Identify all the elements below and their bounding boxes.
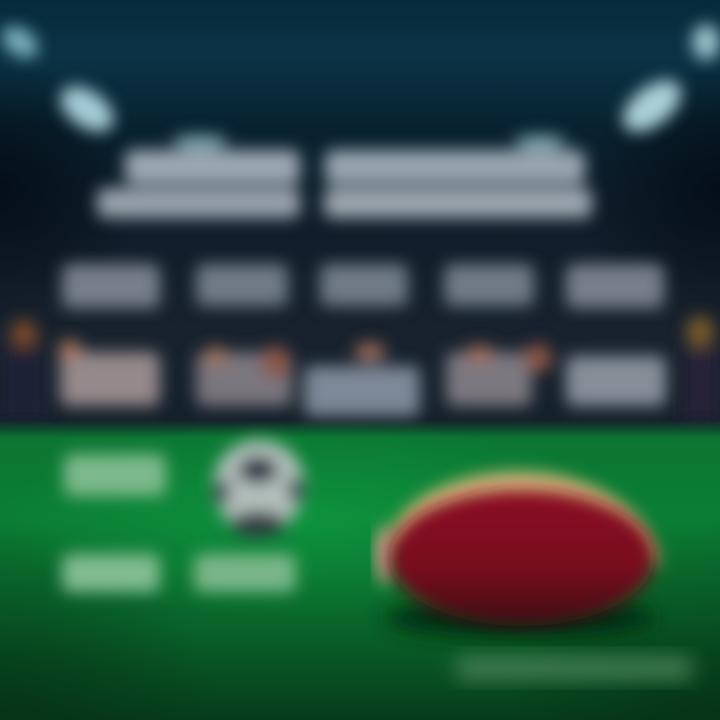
icon: american football xyxy=(376,472,660,638)
stadium background xyxy=(0,0,720,450)
caption bottom right xyxy=(456,656,692,680)
heading xyxy=(97,135,592,218)
grass field xyxy=(0,420,720,720)
icon: soccer ball xyxy=(213,440,305,537)
crowd lights xyxy=(0,316,720,420)
stat blocks on grass xyxy=(62,454,296,592)
floodlights xyxy=(0,20,720,142)
row of cards 2 xyxy=(58,340,666,416)
row of cards 1 xyxy=(62,264,664,308)
